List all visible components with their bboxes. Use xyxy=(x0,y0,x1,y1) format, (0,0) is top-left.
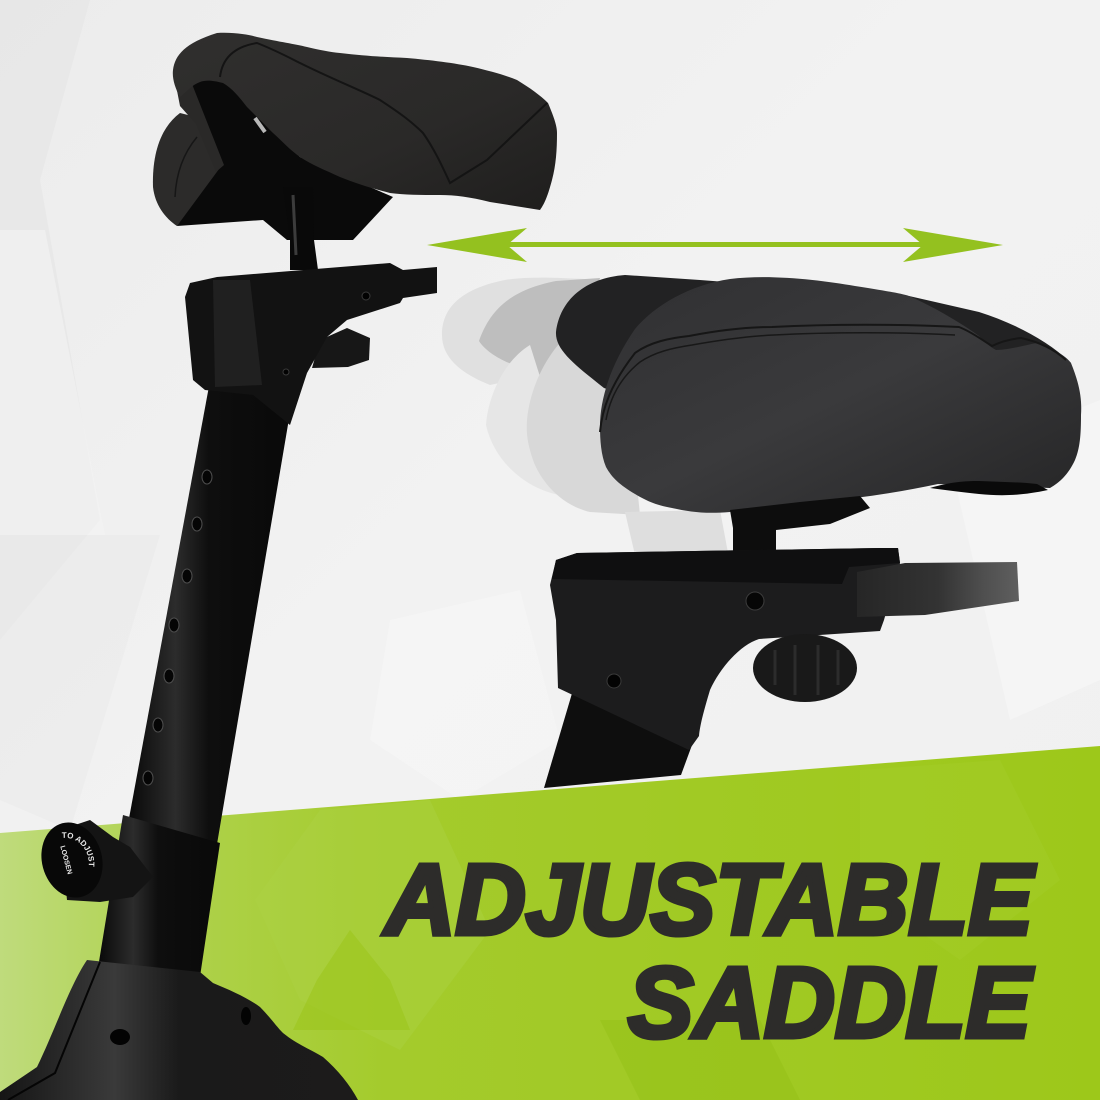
saddle top xyxy=(173,33,557,210)
screw xyxy=(746,592,764,610)
bracket top face xyxy=(552,548,900,584)
locking knob xyxy=(41,820,146,902)
hole xyxy=(607,674,621,688)
upper saddle xyxy=(153,33,557,270)
inner tube xyxy=(125,370,293,850)
bracket facet xyxy=(213,280,262,387)
seat post assembly xyxy=(0,263,437,1100)
base holes xyxy=(110,1007,251,1045)
saddle top xyxy=(600,277,1081,513)
adjustment knob xyxy=(753,634,857,702)
small knob xyxy=(312,328,370,368)
post highlight xyxy=(293,195,296,255)
lower tube xyxy=(544,690,692,788)
saddle front rim xyxy=(173,70,224,172)
direction arrow xyxy=(427,228,1003,262)
outer sleeve xyxy=(96,815,220,990)
title: adjustable saddle: SADDLE xyxy=(628,947,1034,1059)
large close-up saddle xyxy=(556,275,1081,553)
green banner xyxy=(0,746,1100,1100)
ghost posts xyxy=(625,510,728,555)
seat post connector xyxy=(283,187,318,270)
locking knob: TO ADJUST xyxy=(62,832,94,867)
base seam xyxy=(8,962,100,1100)
spring highlight xyxy=(255,118,265,132)
bracket body xyxy=(550,548,900,750)
underside frame xyxy=(177,76,393,240)
rear saddle shell xyxy=(556,275,1071,440)
adjustment holes xyxy=(143,470,212,785)
title: adjustable saddle: ADJUSTABLE xyxy=(382,844,1036,956)
saddle stitching xyxy=(600,325,1066,432)
seat clamp xyxy=(730,496,870,553)
ghost saddles showing movement xyxy=(442,278,728,555)
rear lobe xyxy=(153,113,225,226)
bracket head xyxy=(185,263,437,425)
bracket screws xyxy=(283,292,370,375)
close-up seat rail bracket xyxy=(544,548,1019,788)
locking knob: LOOSEN xyxy=(58,845,73,875)
frame base xyxy=(0,960,358,1100)
saddle underside xyxy=(930,481,1048,495)
stitching xyxy=(220,43,547,183)
sliding rail xyxy=(857,562,1019,617)
background hexagon pattern xyxy=(0,0,1100,830)
title: adjustable saddle xyxy=(382,844,1036,1059)
